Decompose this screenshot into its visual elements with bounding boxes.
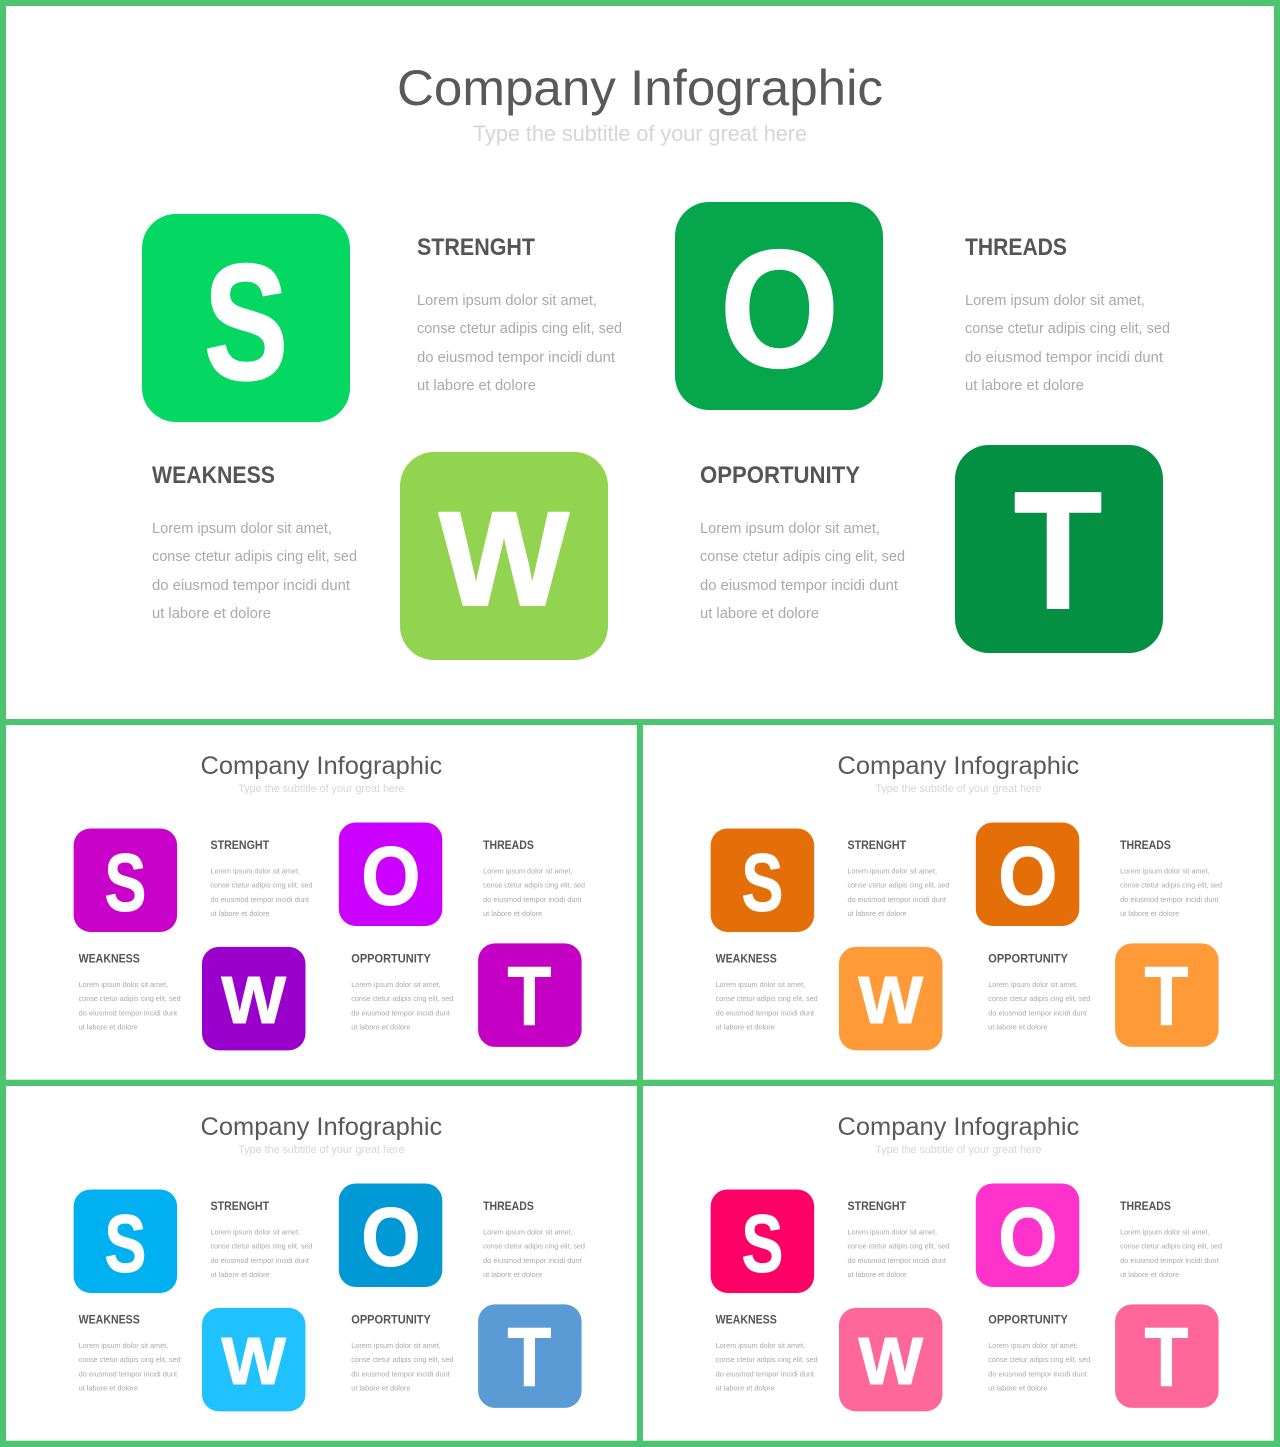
icon: W tile <box>839 947 942 1050</box>
text block: opportunity: Lorem ipsum dolor sit amet, <box>351 980 441 989</box>
text block: threads: Lorem ipsum dolor sit amet, <box>1120 1228 1210 1237</box>
icon: O tile <box>339 1183 442 1287</box>
text block: weakness: Lorem ipsum dolor sit amet, <box>152 520 332 537</box>
text block: threads: conse ctetur adipis cing elit, sed <box>483 881 585 890</box>
panel: blue SWOT slide <box>6 1086 637 1441</box>
text block: weakness: conse ctetur adipis cing elit, sed <box>152 548 357 565</box>
text block: weakness <box>152 462 357 622</box>
text block: opportunity: ut labore et dolore <box>988 1022 1047 1031</box>
icon: T tile: T <box>507 1310 551 1403</box>
text block: weakness: WEAKNESS <box>79 1312 140 1326</box>
text block: weakness: Lorem ipsum dolor sit amet, <box>716 1341 805 1350</box>
text block: opportunity: conse ctetur adipis cing elit, sed <box>351 1355 453 1364</box>
text block: strength: STRENGHT <box>210 838 270 852</box>
text block: strength: STRENGHT <box>847 838 907 852</box>
text block: opportunity: conse ctetur adipis cing elit, sed <box>351 994 453 1003</box>
icon: O tile <box>976 822 1079 926</box>
icon: S tile: S <box>104 838 146 929</box>
text block: strength: do eiusmod tempor incidi dunt <box>210 895 310 904</box>
text block: weakness: WEAKNESS <box>152 462 275 489</box>
text block: strength: STRENGHT <box>210 1199 270 1213</box>
text block: strength: Lorem ipsum dolor sit amet, <box>417 292 597 309</box>
text block: weakness: WEAKNESS <box>716 951 777 965</box>
text block: weakness: do eiusmod tempor incidi dunt <box>716 1009 815 1018</box>
icon: S tile <box>711 1189 814 1293</box>
text block: weakness: ut labore et dolore <box>79 1383 138 1392</box>
icon: O tile: O <box>361 829 420 922</box>
text block: threads: conse ctetur adipis cing elit, sed <box>965 320 1170 337</box>
icon: O tile: O <box>998 1190 1057 1283</box>
text block: weakness: do eiusmod tempor incidi dunt <box>79 1370 178 1379</box>
text block: threads: do eiusmod tempor incidi dunt <box>965 349 1164 366</box>
icon: W tile <box>202 947 305 1050</box>
text block: opportunity <box>988 951 1090 1031</box>
text block: strength: conse ctetur adipis cing elit, sed <box>210 881 312 890</box>
text block: threads <box>483 838 585 918</box>
text block: strength: conse ctetur adipis cing elit, sed <box>847 881 949 890</box>
text block: threads: Lorem ipsum dolor sit amet, <box>483 1228 573 1237</box>
icon: W tile: W <box>858 964 923 1038</box>
icon: T tile <box>478 943 582 1047</box>
text block: weakness: conse ctetur adipis cing elit, sed <box>716 994 818 1003</box>
text block: strength: ut labore et dolore <box>210 1270 270 1279</box>
icon: S tile: S <box>204 230 288 414</box>
text block: weakness <box>716 1312 818 1392</box>
panel: orange SWOT slide <box>643 725 1274 1080</box>
text block: weakness: ut labore et dolore <box>716 1022 775 1031</box>
text block: weakness <box>716 951 818 1031</box>
subtitle: Type the subtitle of your great here <box>238 1144 404 1156</box>
text block: weakness: do eiusmod tempor incidi dunt <box>79 1009 178 1018</box>
text block: strength: Lorem ipsum dolor sit amet, <box>210 867 300 876</box>
icon: W tile <box>400 452 608 660</box>
text block: strength: STRENGHT <box>417 234 535 261</box>
text block: strength: do eiusmod tempor incidi dunt <box>847 1256 947 1265</box>
text block: threads: do eiusmod tempor incidi dunt <box>483 1256 583 1265</box>
text block: strength <box>847 838 949 918</box>
text block: opportunity: ut labore et dolore <box>351 1022 410 1031</box>
text block: opportunity: ut labore et dolore <box>700 605 819 622</box>
text block: threads: ut labore et dolore <box>483 1270 542 1279</box>
text block: weakness: ut labore et dolore <box>152 605 271 622</box>
icon: T tile <box>1115 1304 1219 1408</box>
title: Company Infographic <box>201 752 442 780</box>
text block: opportunity: conse ctetur adipis cing elit, sed <box>988 994 1090 1003</box>
icon: O tile <box>339 822 442 926</box>
text block: threads: Lorem ipsum dolor sit amet, <box>965 292 1145 309</box>
text block: opportunity: Lorem ipsum dolor sit amet, <box>988 1341 1078 1350</box>
title: Company Infographic <box>838 752 1079 780</box>
text block: opportunity: conse ctetur adipis cing elit, sed <box>988 1355 1090 1364</box>
text block: strength <box>847 1199 949 1279</box>
text block: strength: do eiusmod tempor incidi dunt <box>417 349 616 366</box>
icon: W tile: W <box>858 1325 923 1399</box>
text block: threads: conse ctetur adipis cing elit, sed <box>1120 1242 1222 1251</box>
text block: strength <box>417 234 622 394</box>
text block: weakness: WEAKNESS <box>716 1312 777 1326</box>
text block: weakness: conse ctetur adipis cing elit, sed <box>79 994 181 1003</box>
text block: strength: STRENGHT <box>847 1199 907 1213</box>
text block: threads: conse ctetur adipis cing elit, sed <box>1120 881 1222 890</box>
icon: T tile: T <box>1144 949 1188 1042</box>
text block: threads: THREADS <box>483 1199 534 1213</box>
icon: W tile: W <box>439 485 570 634</box>
icon: S tile: S <box>741 838 783 929</box>
panel: purple SWOT slide <box>6 725 637 1080</box>
text block: strength: conse ctetur adipis cing elit, sed <box>417 320 622 337</box>
text block: threads <box>1120 838 1222 918</box>
text block: opportunity: OPPORTUNITY <box>988 951 1068 965</box>
icon: O tile: O <box>998 829 1057 922</box>
icon: S tile <box>142 214 350 422</box>
text block: weakness: conse ctetur adipis cing elit, sed <box>79 1355 181 1364</box>
text block: threads: ut labore et dolore <box>1120 1270 1179 1279</box>
icon: W tile <box>839 1308 942 1411</box>
text block: threads: THREADS <box>965 234 1067 261</box>
text block: weakness: ut labore et dolore <box>79 1022 138 1031</box>
text block: opportunity: OPPORTUNITY <box>351 951 431 965</box>
text block: threads: ut labore et dolore <box>483 909 542 918</box>
text block: threads: THREADS <box>483 838 534 852</box>
text block: weakness: do eiusmod tempor incidi dunt <box>152 577 351 594</box>
icon: T tile: T <box>1144 1310 1188 1403</box>
icon: T tile <box>1115 943 1219 1047</box>
text block: opportunity: Lorem ipsum dolor sit amet, <box>700 520 880 537</box>
text block: threads: do eiusmod tempor incidi dunt <box>483 895 583 904</box>
text block: threads: Lorem ipsum dolor sit amet, <box>483 867 573 876</box>
text block: strength <box>210 1199 312 1279</box>
icon: S tile: S <box>741 1199 783 1290</box>
text block: opportunity: do eiusmod tempor incidi dunt <box>988 1009 1088 1018</box>
text block: weakness <box>79 951 181 1031</box>
subtitle: Type the subtitle of your great here <box>238 783 404 795</box>
text block: threads: do eiusmod tempor incidi dunt <box>1120 895 1220 904</box>
text block: opportunity: OPPORTUNITY <box>351 1312 431 1326</box>
text block: opportunity: Lorem ipsum dolor sit amet, <box>988 980 1078 989</box>
text block: opportunity <box>351 951 453 1031</box>
text block: strength: do eiusmod tempor incidi dunt <box>210 1256 310 1265</box>
icon: O tile <box>976 1183 1079 1287</box>
icon: W tile <box>202 1308 305 1411</box>
icon: S tile: S <box>104 1199 146 1290</box>
subtitle: Type the subtitle of your great here <box>875 1144 1041 1156</box>
text block: opportunity: OPPORTUNITY <box>988 1312 1068 1326</box>
text block: threads: Lorem ipsum dolor sit amet, <box>1120 867 1210 876</box>
text block: opportunity: do eiusmod tempor incidi dunt <box>988 1370 1088 1379</box>
text block: strength: conse ctetur adipis cing elit, sed <box>847 1242 949 1251</box>
icon: T tile <box>955 445 1163 653</box>
icon: S tile <box>711 828 814 932</box>
text block: weakness: Lorem ipsum dolor sit amet, <box>79 980 168 989</box>
text block: opportunity: conse ctetur adipis cing elit, sed <box>700 548 905 565</box>
text block: strength: Lorem ipsum dolor sit amet, <box>847 867 937 876</box>
text block: opportunity: Lorem ipsum dolor sit amet, <box>351 1341 441 1350</box>
icon: T tile: T <box>507 949 551 1042</box>
text block: opportunity: ut labore et dolore <box>351 1383 410 1392</box>
icon: O tile: O <box>361 1190 420 1283</box>
text block: opportunity <box>988 1312 1090 1392</box>
text block: opportunity <box>351 1312 453 1392</box>
text block: weakness: Lorem ipsum dolor sit amet, <box>716 980 805 989</box>
text block: threads: ut labore et dolore <box>965 377 1084 394</box>
text block: weakness <box>79 1312 181 1392</box>
text block: strength: ut labore et dolore <box>210 909 270 918</box>
subtitle: Type the subtitle of your great here <box>473 121 807 146</box>
subtitle: Type the subtitle of your great here <box>875 783 1041 795</box>
icon: O tile: O <box>720 216 839 402</box>
text block: opportunity <box>700 462 905 622</box>
text block: opportunity: do eiusmod tempor incidi dunt <box>351 1370 451 1379</box>
text block: opportunity: OPPORTUNITY <box>700 462 860 489</box>
text block: threads: ut labore et dolore <box>1120 909 1179 918</box>
text block: opportunity: do eiusmod tempor incidi dunt <box>700 577 899 594</box>
icon: T tile <box>478 1304 582 1408</box>
text block: strength: ut labore et dolore <box>847 1270 907 1279</box>
text block: threads: conse ctetur adipis cing elit, sed <box>483 1242 585 1251</box>
text block: threads: do eiusmod tempor incidi dunt <box>1120 1256 1220 1265</box>
text block: threads <box>1120 1199 1222 1279</box>
text block: weakness: ut labore et dolore <box>716 1383 775 1392</box>
text block: threads <box>483 1199 585 1279</box>
text block: weakness: Lorem ipsum dolor sit amet, <box>79 1341 168 1350</box>
text block: threads: THREADS <box>1120 838 1171 852</box>
icon: W tile: W <box>221 1325 286 1399</box>
title: Company Infographic <box>838 1113 1079 1141</box>
text block: strength <box>210 838 312 918</box>
icon: T tile: T <box>1014 458 1102 644</box>
icon: O tile <box>675 202 883 410</box>
panel: main green SWOT slide <box>6 6 1274 719</box>
text block: weakness: WEAKNESS <box>79 951 140 965</box>
text block: opportunity: ut labore et dolore <box>988 1383 1047 1392</box>
text block: threads <box>965 234 1170 394</box>
text block: strength: ut labore et dolore <box>417 377 536 394</box>
icon: S tile <box>74 828 177 932</box>
title: Company Infographic <box>201 1113 442 1141</box>
text block: strength: conse ctetur adipis cing elit, sed <box>210 1242 312 1251</box>
text block: threads: THREADS <box>1120 1199 1171 1213</box>
text block: weakness: conse ctetur adipis cing elit, sed <box>716 1355 818 1364</box>
icon: S tile <box>74 1189 177 1293</box>
panel: pink SWOT slide <box>643 1086 1274 1441</box>
text block: strength: Lorem ipsum dolor sit amet, <box>847 1228 937 1237</box>
text block: opportunity: do eiusmod tempor incidi dunt <box>351 1009 451 1018</box>
title: Company Infographic <box>397 60 883 116</box>
text block: strength: do eiusmod tempor incidi dunt <box>847 895 947 904</box>
text block: strength: ut labore et dolore <box>847 909 907 918</box>
text block: strength: Lorem ipsum dolor sit amet, <box>210 1228 300 1237</box>
icon: W tile: W <box>221 964 286 1038</box>
text block: weakness: do eiusmod tempor incidi dunt <box>716 1370 815 1379</box>
